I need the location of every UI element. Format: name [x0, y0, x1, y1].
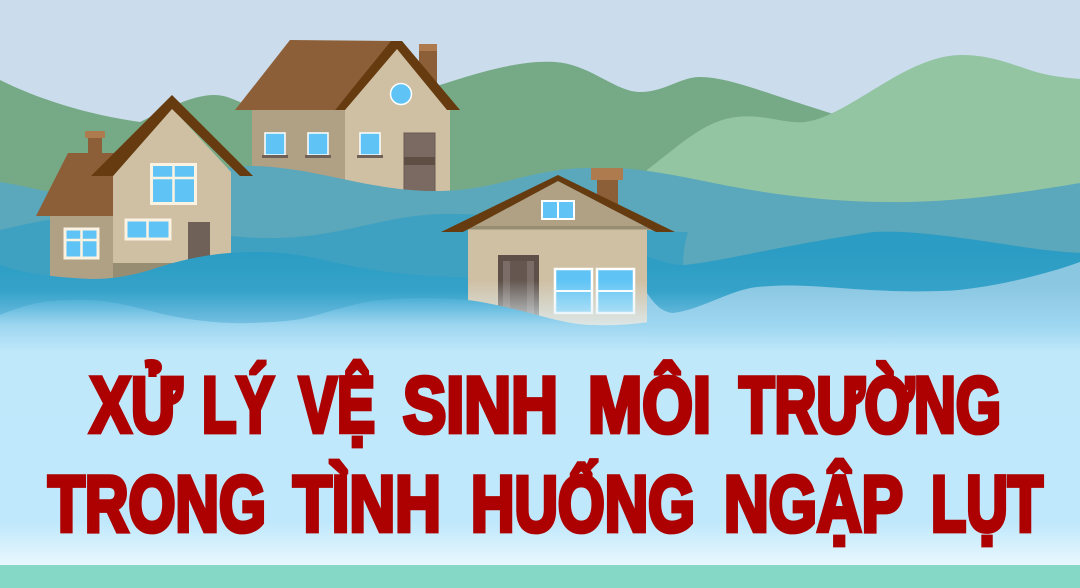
annex wall [50, 216, 114, 282]
title line 1: MÔI [588, 360, 711, 449]
title line 2 [48, 459, 1043, 548]
gable [465, 181, 652, 230]
chimney [419, 44, 437, 94]
lower pale background [0, 350, 1080, 566]
title line 1: XỬ [90, 360, 182, 449]
title line 1: LÝ [202, 360, 274, 449]
back mountains [0, 62, 837, 260]
title [48, 360, 1043, 548]
title line 2: HUỐNG [471, 459, 695, 548]
house: right front [441, 168, 675, 330]
attic window [542, 201, 574, 219]
bottom strip [0, 565, 1080, 588]
foreground wave right [647, 262, 1080, 360]
windows [262, 133, 383, 158]
roof edge [441, 175, 675, 232]
lower wall [113, 263, 183, 282]
mountains [0, 55, 1080, 260]
light hill [647, 55, 1080, 230]
round window [390, 84, 412, 104]
roof edge [91, 95, 253, 176]
back water layer [0, 166, 1080, 340]
windows [555, 269, 634, 313]
gable band [466, 226, 650, 230]
chimney [591, 168, 623, 212]
chimney [85, 131, 105, 157]
front water layer [0, 232, 1080, 360]
house: upper back [235, 40, 460, 200]
door [498, 255, 539, 325]
house: left [36, 95, 253, 282]
roof edge [335, 41, 460, 110]
title line 1 [90, 360, 1001, 449]
title line 2: TÌNH [293, 459, 441, 548]
door [404, 133, 435, 195]
roof [235, 40, 392, 110]
title line 2: NGẬP [724, 459, 903, 548]
windows [65, 164, 196, 258]
sky [0, 0, 1080, 340]
middle water layer [0, 214, 688, 340]
wall [468, 229, 647, 329]
foreground wave left [0, 298, 650, 360]
title line 2: LỤT [931, 459, 1043, 548]
title line 2: TRONG [48, 459, 266, 548]
walls [252, 46, 450, 200]
annex roof [36, 153, 118, 216]
title line 1: VỆ [299, 360, 375, 449]
title line 1: SINH [403, 360, 558, 449]
main wall [113, 108, 231, 264]
wall fade [468, 280, 647, 330]
door [188, 222, 210, 264]
